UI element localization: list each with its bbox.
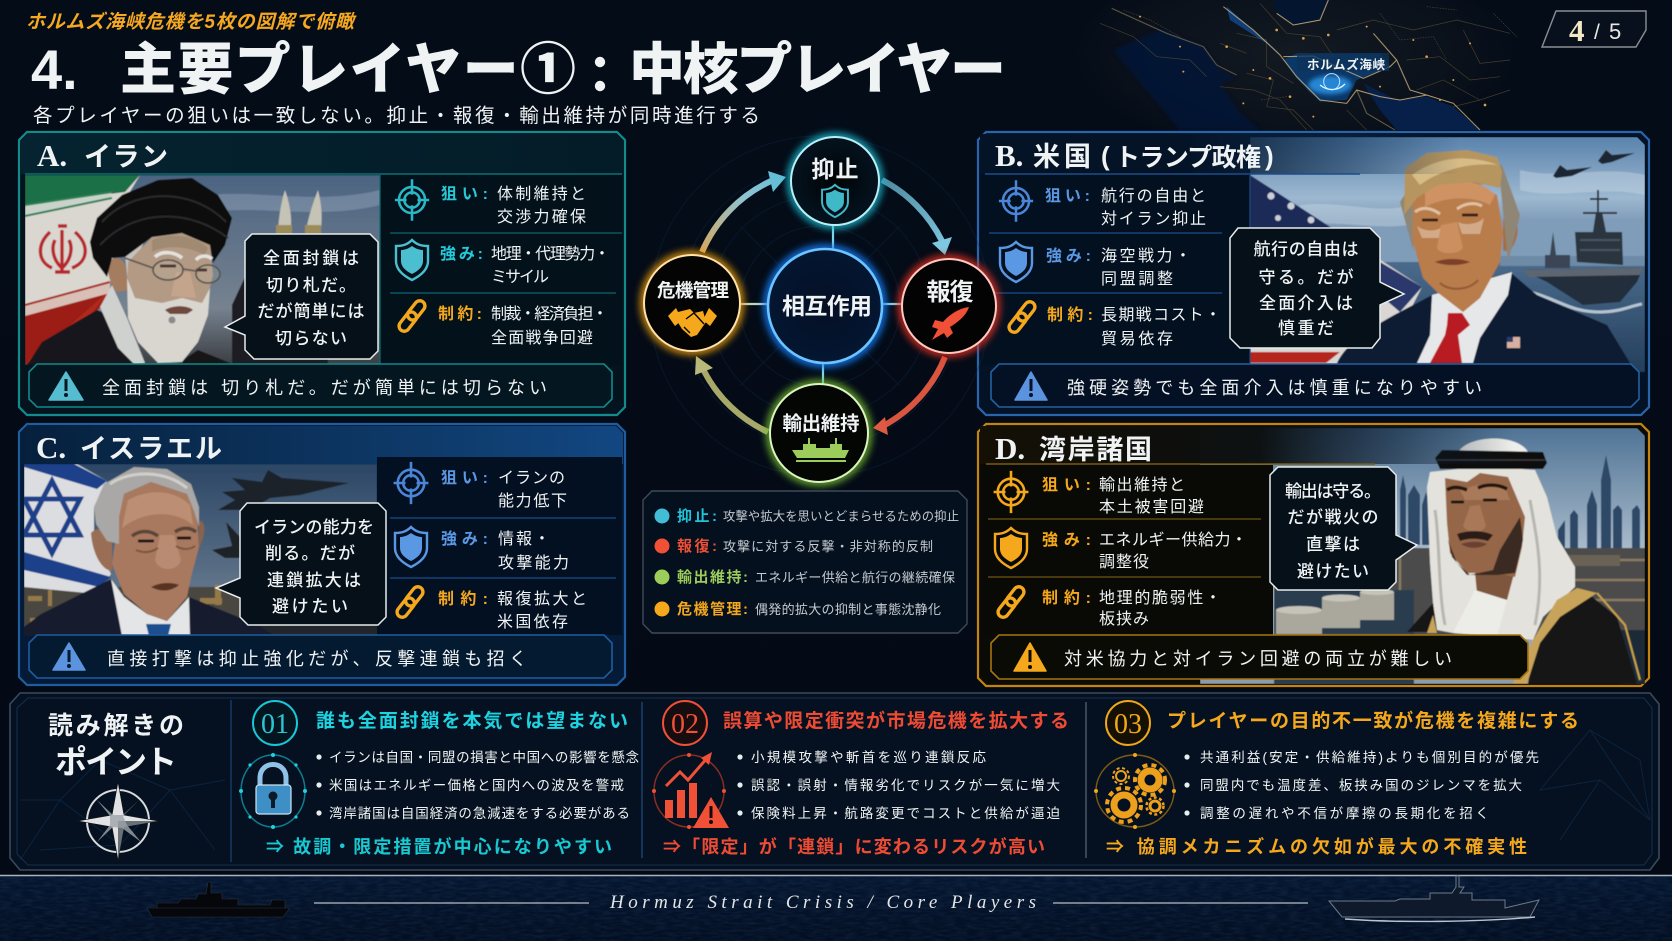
panel B header: B. [995, 138, 1023, 173]
brows, eyes, glasses [155, 253, 212, 260]
speech bubble: 切らない [275, 329, 347, 348]
strength row [441, 530, 569, 572]
goal row: 体制維持と [497, 185, 586, 203]
beard [1448, 517, 1523, 575]
point 01 bullets: 米国はエネルギー価格と国内への波及を警戒 [329, 778, 624, 793]
goal row: 狙い: [441, 185, 488, 203]
point 01 bullets: 湾岸諸国は自国経済の急減速をする必要がある [329, 805, 630, 821]
panel A stats [380, 175, 622, 365]
point 01 [239, 701, 639, 857]
goal row [441, 185, 586, 226]
bisht [1528, 595, 1637, 684]
speech bubble [1270, 467, 1417, 590]
strength row: 強み: [1046, 247, 1091, 265]
point 01 bullets: イランは自国・同盟の損害と中国への影響を懸念 [329, 750, 639, 765]
suit [24, 579, 275, 636]
strength row: 強み: [441, 530, 488, 548]
goal row [441, 469, 567, 510]
point 03 [1094, 701, 1579, 857]
interaction diagram [644, 136, 996, 482]
warning bar: 対米協力と対イラン回避の両立が難しい [1064, 649, 1452, 669]
panel A header: A. [37, 138, 67, 173]
strength row [1042, 531, 1247, 571]
node: retaliation: 報復 [926, 279, 974, 306]
goal row: イランの [498, 470, 565, 487]
legend row: deterrence: 攻撃や拡大を思いとどまらせるための抑止 [723, 508, 959, 524]
point 02 heading: 誤算や限定衝突が市場危機を拡大する [723, 709, 1069, 732]
constraint row: 制約: [438, 590, 488, 608]
number badge 01 [253, 701, 297, 745]
strength row: 強み: [1042, 531, 1091, 549]
goal row [1042, 476, 1204, 516]
page badge: / [1594, 21, 1600, 44]
arrow: export to crisis management [695, 356, 768, 432]
goal row: 狙い: [1045, 187, 1090, 205]
point 02 bullets: 保険料上昇・航路変更でコストと供給が逼迫 [751, 805, 1060, 821]
icon: chain [397, 299, 427, 333]
constraint row: 制約: [1042, 589, 1091, 607]
speech bubble: 連鎖拡大は [267, 571, 361, 590]
speech bubble: 全面介入は [1259, 294, 1353, 313]
portrait: Iran leader [25, 175, 380, 365]
flag [1250, 260, 1422, 364]
face [1445, 473, 1525, 577]
panel B header: トランプ政権 [1115, 144, 1261, 172]
constraint row: 板挟み [1099, 610, 1149, 628]
icon: handshake [668, 308, 717, 337]
legend row: crisis management [654, 600, 941, 618]
node: crisis management [644, 255, 740, 351]
icon: chain [1007, 300, 1037, 334]
warning bar [991, 635, 1528, 679]
icon: gears [1094, 753, 1176, 829]
constraint row: 全面戦争回避 [491, 329, 593, 347]
point 02 bullets: 小規模攻撃や斬首を巡り連鎖反応 [751, 750, 986, 765]
neck and thobe [1475, 570, 1515, 600]
title [31, 38, 1006, 101]
node: deterrence: 抑止 [812, 156, 858, 182]
constraint row: 貿易依存 [1101, 330, 1173, 348]
number badge 03: 03 [1114, 709, 1142, 740]
footer caption: Hormuz Strait Crisis / Core Players [609, 892, 1036, 913]
constraint row: 報復拡大と [497, 590, 587, 608]
reading points heading: ポイント [55, 744, 177, 780]
reading points heading: 読み解きの [48, 712, 184, 740]
goal row: 輸出維持と [1099, 476, 1185, 494]
tanks [1276, 592, 1394, 635]
goal row: 能力低下 [498, 492, 567, 510]
point 01 heading: 誰も全面封鎖を本気では望まない [316, 710, 628, 732]
point 03 bullets: 同盟内でも温度差、板挟み国のジレンマを拡大 [1200, 778, 1522, 793]
cap and agal [1458, 438, 1528, 452]
footer [0, 876, 1672, 941]
turban [90, 178, 232, 277]
icon: ship [792, 438, 849, 462]
constraint row: 米国依存 [497, 613, 568, 631]
map: Strait of Hormuz [1070, 0, 1520, 155]
strength row: 攻撃能力 [498, 554, 569, 572]
icon: compass [78, 782, 158, 860]
panel D header [980, 426, 1647, 466]
jets [1553, 150, 1635, 178]
speech bubble: 避けたい [1297, 562, 1369, 581]
panel A header: イラン [84, 142, 168, 172]
goal row: 航行の自由と [1101, 187, 1206, 205]
point 03 bullets: 調整の遅れや不信が摩擦の長期化を招く [1200, 806, 1489, 821]
cloth [1427, 468, 1575, 640]
shirt [111, 579, 190, 636]
portrait: Gulf leader [1200, 428, 1645, 685]
panel C: Israel [19, 424, 625, 685]
face [127, 232, 214, 304]
portrait: US leader [1250, 137, 1645, 372]
number badge 01: 01 [261, 709, 289, 740]
panel A header [21, 134, 623, 174]
panel A: Iran [19, 132, 625, 415]
node: mutual interaction [768, 249, 882, 363]
number badge 02: 02 [671, 709, 699, 740]
page badge: 5 [1609, 19, 1621, 44]
panel D header: 湾岸諸国 [1039, 435, 1152, 465]
strength row: 同盟調整 [1101, 270, 1173, 288]
number badge 02 [663, 701, 707, 745]
point 01 conclusion: ⇒ 故調・限定措置が中心になりやすい [266, 836, 612, 857]
goal row: 本土被害回避 [1099, 498, 1204, 516]
speech bubble: 直撃は [1306, 535, 1360, 554]
panel D: Gulf states [978, 424, 1649, 686]
icon: rising chart with warning [652, 752, 729, 829]
subtitle: 各プレイヤーの狙いは一致しない。抑止・報復・輸出維持が同時進行する [33, 105, 760, 127]
legend row: export maintenance [654, 568, 955, 586]
speech bubble [1230, 228, 1404, 348]
strength row: ミサイル [491, 269, 549, 286]
point 02 bullets: 誤認・誤射・情報劣化でリスクが一気に増大 [751, 778, 1060, 793]
point 03 bullets: 共通利益(安定・供給維持)よりも個別目的が優先 [1200, 750, 1539, 765]
icon: left ship [147, 882, 290, 917]
title: 主要プレイヤー① [120, 38, 576, 101]
icon: chain [395, 585, 425, 619]
panel B header [980, 134, 1647, 174]
constraint row [1042, 589, 1221, 628]
icon: chain [996, 585, 1026, 619]
connector lines [740, 225, 904, 386]
icon: padlock [239, 753, 307, 829]
constraint row [438, 305, 608, 347]
legend row: crisis management: 偶発的拡大の抑制と事態沈静化 [755, 602, 941, 617]
warning bar [29, 364, 612, 407]
strength row: 強み: [440, 245, 483, 263]
strength row: 地理・代理勢力・ [491, 245, 610, 263]
panel C header: C. [36, 430, 66, 465]
flag [24, 464, 111, 594]
constraint row [1047, 306, 1221, 348]
strength row: 情報・ [498, 530, 550, 548]
point 02 conclusion: ⇒「限定」が「連鎖」に変わるリスクが高い [663, 836, 1045, 857]
point 01 bullets [316, 750, 639, 821]
icon: shield [396, 240, 428, 280]
panel C header [21, 426, 623, 465]
page badge [1542, 11, 1646, 48]
shirt [1417, 272, 1512, 363]
node: crisis management: 危機管理 [657, 280, 729, 301]
face [1413, 182, 1503, 312]
beard [127, 278, 210, 363]
skyline [1400, 455, 1645, 550]
legend row: retaliation: 攻撃に対する反撃・非対称的反制 [723, 539, 933, 554]
speech bubble: 削る。だが [265, 543, 355, 563]
node: deterrence [791, 137, 879, 225]
legend row: deterrence [654, 507, 959, 525]
panel B stats [980, 175, 1250, 365]
strength row: 調整役 [1099, 553, 1149, 571]
panel B: United States [978, 132, 1649, 415]
point 02 bullets [737, 750, 1060, 821]
strength row: エネルギー供給力・ [1099, 531, 1247, 549]
speech bubble [225, 234, 378, 359]
speech bubble: 航行の自由は [1254, 240, 1358, 259]
goal row [1045, 187, 1206, 228]
icon: target [994, 471, 1028, 513]
warning bar: 全面封鎖は 切り札だ。だが簡単には切らない [102, 378, 547, 398]
hair top [1404, 150, 1502, 215]
reading points heading [48, 712, 184, 780]
goal row: 狙い: [441, 469, 488, 487]
node: export maintenance [770, 384, 868, 482]
panel D header: D. [995, 431, 1025, 466]
arrow: crisis management to deterrence [702, 171, 786, 252]
ears [91, 529, 112, 571]
page badge: 4 [1569, 13, 1584, 48]
constraint row: 制約: [1047, 306, 1093, 324]
constraint row: 制裁・経済負担・ [491, 305, 608, 323]
warning bar: 強硬姿勢でも全面介入は慎重になりやすい [1067, 378, 1482, 398]
scarf [100, 285, 145, 365]
node: export maintenance: 輸出維持 [782, 413, 860, 435]
panel B header: ) [1265, 141, 1274, 171]
goal row: 交渉力確保 [497, 208, 586, 226]
title: 中核プレイヤー [629, 38, 1006, 101]
constraint row: 地理的脆弱性・ [1099, 589, 1221, 607]
speech bubble: だが簡単には [258, 301, 364, 321]
brows, eyes, mouth [132, 528, 196, 536]
panel B header: ( [1101, 141, 1110, 171]
robe [27, 310, 135, 365]
icon: rocket [932, 307, 969, 340]
speech bubble: 全面封鎖は [263, 249, 359, 268]
point 03 conclusion: ⇒ 協調メカニズムの欠如が最大の不確実性 [1106, 836, 1527, 857]
panel D stats [980, 465, 1273, 635]
carrier [1536, 274, 1640, 306]
icon: shield [1000, 242, 1032, 282]
legend row: retaliation: 報復: [677, 538, 717, 555]
ear [1503, 218, 1518, 251]
speech bubble: 慎重だ [1278, 319, 1334, 338]
brows, eyes [1447, 485, 1507, 490]
panel C stats [377, 457, 622, 635]
constraint row: 制約: [438, 305, 482, 323]
strength row [1046, 247, 1191, 288]
warning bar [991, 364, 1639, 407]
legend row: deterrence: 抑止: [677, 507, 717, 525]
constraint row [438, 590, 587, 631]
hair [94, 467, 199, 544]
node: retaliation [902, 259, 996, 353]
point 02 [652, 701, 1069, 857]
jets [218, 470, 349, 510]
icon: target [394, 462, 428, 504]
speech bubble: だが戦火の [1288, 507, 1378, 527]
panel: reading points [10, 693, 1659, 870]
point 03 heading: プレイヤーの目的不一致が危機を複雑にする [1167, 709, 1579, 732]
goal row: 狙い: [1042, 476, 1091, 494]
speech bubble: 避けたい [272, 597, 348, 616]
hair side [1400, 155, 1520, 262]
point 03 bullets [1184, 750, 1539, 821]
speech bubble [216, 503, 386, 625]
ear and hair [108, 258, 128, 292]
icon: shield [395, 527, 427, 567]
portrait: Israel leader [24, 464, 380, 636]
icon: target [395, 179, 429, 221]
strength row: 海空戦力・ [1101, 247, 1191, 265]
warning bar [29, 635, 612, 678]
strength row [440, 245, 610, 286]
arrow: retaliation to export [873, 357, 945, 435]
legend [643, 491, 967, 633]
icon: target [999, 180, 1033, 222]
icon: shield [995, 528, 1027, 568]
icon: right ship [1329, 876, 1539, 921]
constraint row: 長期戦コスト・ [1101, 306, 1221, 324]
number badge 03 [1106, 701, 1150, 745]
title: 4. [31, 38, 78, 101]
legend row: export maintenance: 輸出維持: [677, 568, 748, 586]
map label: ホルムズ海峡 [1307, 57, 1385, 72]
tie [1430, 313, 1470, 363]
node: mutual interaction: 相互作用 [782, 293, 872, 319]
speech bubble: 守る。だが [1258, 267, 1354, 287]
warning bar: 直接打撃は抑止強化だが、反撃連鎖も招く [107, 649, 527, 669]
speech bubble: 輸出は守る。 [1285, 482, 1381, 501]
legend row: export maintenance: エネルギー供給と航行の継続確保 [755, 570, 955, 585]
face [112, 482, 199, 621]
panel C header: イスラエル [80, 434, 222, 464]
map label [1297, 53, 1389, 72]
panel B header: 米国 [1033, 142, 1091, 172]
legend row: crisis management: 危機管理: [677, 600, 748, 618]
goal row: 対イラン抑止 [1101, 210, 1206, 228]
legend row: retaliation [654, 538, 933, 555]
speech bubble: 切り札だ。 [266, 276, 356, 295]
suit [1336, 272, 1630, 364]
speech bubble: イランの能力を [254, 518, 374, 537]
kicker: ホルムズ海峡危機を5枚の図解で俯瞰 [26, 11, 357, 33]
arrow: deterrence to retaliation [882, 180, 952, 255]
